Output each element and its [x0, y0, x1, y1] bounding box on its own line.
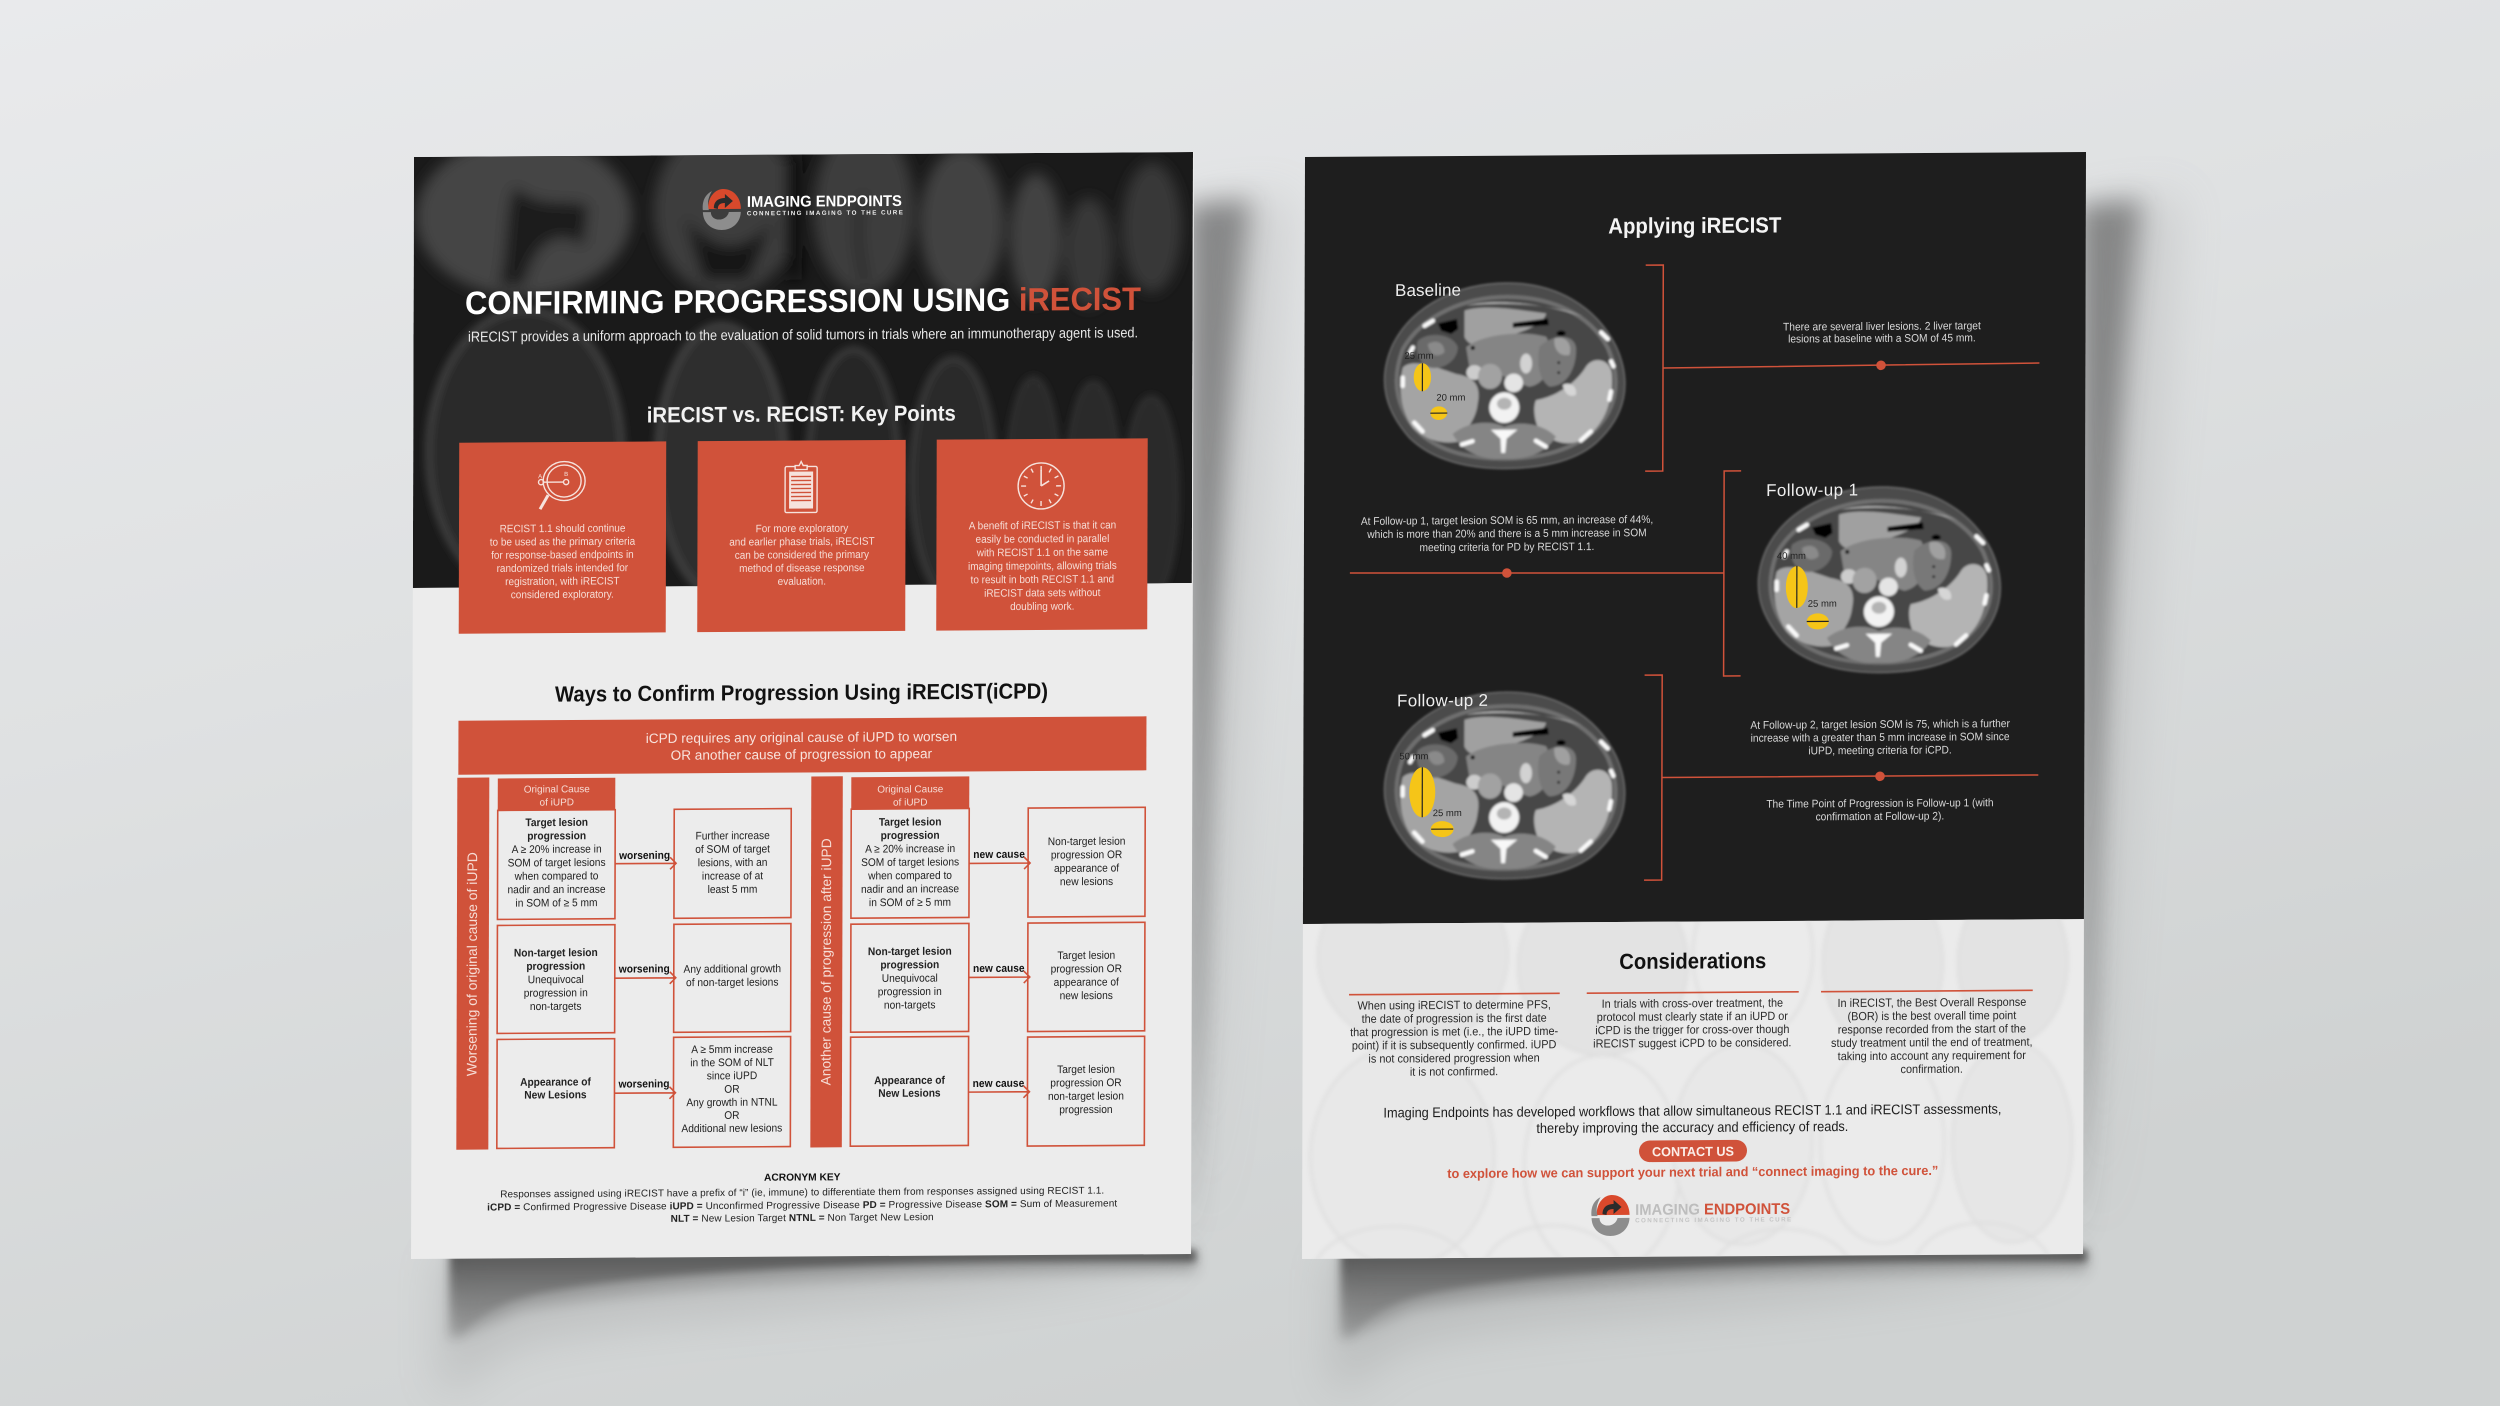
logo: Imaging Endpoints: CONNECTING IMAGING TO THE CURE: [747, 209, 903, 217]
column: PFS consideration: that progression is met (i.e., the iUPD time-: [1350, 1026, 1558, 1039]
text: key point 1: registration, with iRECIST: [505, 576, 620, 588]
side bar: worsening of original cause: Worsening of original cause of iUPD: [464, 852, 480, 1076]
cell: target lesion progression: Target lesion: [525, 816, 588, 829]
CT scan: follow-up 2: [1384, 690, 1625, 880]
cell: appearance of new lesions: [850, 1036, 969, 1146]
cell: non-target lesion progression: non-targets: [884, 999, 936, 1012]
cell: target lesion progression: nadir and an increase: [507, 883, 606, 896]
text: key point 3: easily be conducted in parallel: [976, 534, 1109, 546]
cell: target lesion progression: Target lesion: [879, 816, 942, 829]
cell: non-target lesion progression: non-targets: [530, 1000, 582, 1013]
lesion: 40 mm: [1777, 551, 1808, 608]
lesion: 25 mm: 25 mm: [1433, 808, 1462, 819]
icon: clipboard: [785, 461, 817, 513]
text: key point 3: doubling work.: [1010, 601, 1074, 613]
acronym key: [487, 1170, 1117, 1226]
text: follow-up 1: [1361, 514, 1653, 555]
cell: target lesion progression: [851, 808, 969, 918]
cell: target or non-target progression: progression OR: [1050, 1077, 1122, 1090]
text: baseline: lesions at baseline with a SOM of 45 mm.: [1788, 332, 1976, 346]
icon: magnifier measuring A to B: B: [564, 472, 568, 478]
text: key point 1: for response-based endpoints in: [491, 550, 634, 562]
text: follow-up 1: meeting criteria for PD by RECIST 1.1.: [1419, 541, 1594, 554]
cell: non-target lesion progression: progression in: [878, 986, 942, 998]
header band with brain scans: [413, 122, 1193, 602]
button: contact us: CONTACT US: [1652, 1144, 1734, 1159]
arrow: worsening 1: worsening: [618, 849, 670, 862]
cell: target or new lesions: appearance of: [1054, 976, 1119, 989]
lesion: 25 mm: 25 mm: [1404, 351, 1434, 362]
panel: key point 2: [697, 440, 906, 632]
cell: non-target lesion progression: Non-target lesion: [868, 945, 952, 958]
acronym key: iCPD = Confirmed Progressive Disease iUPD = Unconfirmed Progressive Disease PD = Progressive Disease SOM = Sum of Measurement: [487, 1198, 1117, 1214]
text: key point 1: randomized trials intended for: [497, 563, 629, 575]
arrow: worsening 1: [615, 849, 676, 870]
button: contact us: [1639, 1140, 1747, 1162]
text: key point 2: can be considered the primary: [735, 550, 870, 562]
brain watermark: [1318, 919, 2068, 1259]
table: another cause of progression: [850, 775, 1145, 1147]
cell: non-target lesion progression: progression: [880, 959, 939, 972]
banner: iCPD requirement: iCPD requires any original cause of iUPD to worsen: [646, 729, 957, 746]
header: original cause: [498, 778, 615, 810]
cell: further increase: lesions, with an: [698, 856, 768, 869]
subtitle: iRECIST provides a uniform approach to the evaluation of solid tumors in trials where an immunotherapy agent is used.: [468, 325, 1138, 346]
cell: target lesion progression: when compared to: [867, 870, 952, 883]
cell: further increase: Further increase: [696, 830, 770, 843]
text: key point 1: considered exploratory.: [511, 589, 614, 601]
cell: target lesion progression: in SOM of ≥ 5 mm: [869, 896, 951, 909]
bracket: baseline: [1645, 263, 2040, 471]
call to action: to explore how we can support your next trial and “connect imaging to the cure.”: [1447, 1163, 1938, 1181]
cell: non-target or new lesions: appearance of: [1054, 862, 1119, 875]
banner: iCPD requirement: OR another cause of progression to appear: [671, 746, 933, 763]
cell: target or non-target progression: [1027, 1036, 1145, 1146]
cell: target lesion progression: A ≥ 20% increase in: [865, 843, 955, 856]
column: PFS consideration: When using iRECIST to determine PFS,: [1357, 999, 1551, 1013]
shadow: right page: [1331, 195, 2181, 1395]
text: key point 1: to be used as the primary criteria: [490, 536, 635, 549]
banner: iCPD requirement: [458, 716, 1146, 775]
cell: further increase: [674, 809, 791, 918]
text: follow-up 2: increase with a greater than 5 mm increase in SOM since: [1751, 731, 2010, 745]
cell: non-target lesion progression: Unequivocal: [882, 972, 938, 985]
cell: further increase: least 5 mm: [708, 883, 758, 896]
cell: NLT growth: OR: [724, 1109, 740, 1122]
logo: Imaging Endpoints: IMAGING ENDPOINTS: [1635, 1201, 1790, 1219]
text: baseline: There are several liver lesions. 2 liver target: [1783, 320, 1981, 334]
header: original cause: [851, 776, 969, 809]
arrow: worsening 2: worsening: [618, 963, 670, 976]
text: key point 2: [729, 523, 875, 588]
arrow: new cause 1: [969, 848, 1030, 869]
cell: target lesion progression: [497, 810, 615, 919]
column: BOR consideration: study treatment until the end of treatment,: [1831, 1036, 2033, 1050]
cell: NLT growth: A ≥ 5mm increase: [691, 1043, 773, 1056]
arrow: worsening 3: [614, 1078, 676, 1099]
title: CONFIRMING PROGRESSION USING iRECIST: [465, 281, 1141, 321]
cell: additional growth: [674, 924, 791, 1032]
logo: Imaging Endpoints: [703, 188, 903, 230]
column: cross-over consideration: In trials with cross-over treatment, the: [1602, 997, 1783, 1011]
panel: key point 1: [459, 441, 666, 634]
heading: applying iRECIST: Applying iRECIST: [1608, 212, 1782, 239]
column: BOR consideration: [1821, 990, 2033, 1077]
column: cross-over consideration: iCPD is the trigger for cross-over though: [1595, 1024, 1789, 1037]
side bar: another cause of progression: Another cause of progression after iUPD: [818, 838, 834, 1085]
cell: target lesion progression: A ≥ 20% increase in: [512, 843, 602, 856]
column: cross-over consideration: iRECIST suggest iCPD to be considered.: [1593, 1037, 1791, 1051]
lesion: 20 mm: 20 mm: [1436, 392, 1465, 404]
column: PFS consideration: is not considered progression when: [1368, 1052, 1540, 1066]
cell: appearance of new lesions: Appearance of: [520, 1076, 591, 1089]
heading: key points: iRECIST vs. RECIST: Key Points: [647, 401, 956, 428]
cell: non-target lesion progression: [851, 923, 969, 1032]
cell: target lesion progression: in SOM of ≥ 5 mm: [515, 897, 598, 910]
lesion: 50 mm: [1399, 751, 1435, 817]
bracket: follow-up 2: [1644, 673, 2039, 880]
bracket: follow-up 1: [1350, 471, 1741, 678]
text: key point 2: For more exploratory: [756, 523, 849, 535]
cell: non-target or new lesions: progression OR: [1051, 849, 1123, 862]
text: follow-up 1: At Follow-up 1, target lesion SOM is 65 mm, an increase of 44%,: [1361, 514, 1653, 528]
header: original cause: Original Cause: [877, 784, 944, 796]
acronym key: ACRONYM KEY: [764, 1172, 841, 1184]
text: follow-up 1: which is more than 20% and there is a 5 mm increase in SOM: [1366, 527, 1647, 541]
header: original cause: of iUPD: [540, 797, 574, 809]
header: original cause: Original Cause: [524, 784, 590, 796]
cell: NLT growth: OR: [724, 1083, 740, 1096]
text: key point 1: RECIST 1.1 should continue: [500, 523, 626, 535]
paragraph: workflows: thereby improving the accuracy and efficiency of reads.: [1536, 1118, 1848, 1136]
column: BOR consideration: response recorded from the start of the: [1838, 1023, 2026, 1037]
paragraph: workflows: Imaging Endpoints has developed workflows that allow simultaneous RECIST 1.1 and iRECIST assessments,: [1383, 1101, 2001, 1120]
lesion: 25 mm: [1807, 599, 1837, 629]
arrow: new cause 3: new cause: [973, 1077, 1024, 1090]
arrow: worsening 3: worsening: [618, 1078, 670, 1091]
lesion: 50 mm: 50 mm: [1399, 751, 1429, 762]
text: key point 3: A benefit of iRECIST is that it can: [969, 520, 1116, 532]
arrow: worsening 2: [615, 963, 676, 984]
CT scan: follow-up 2: Follow-up 2: [1397, 691, 1488, 710]
column: BOR consideration: confirmation.: [1901, 1063, 1963, 1076]
cell: additional growth: of non-target lesions: [686, 976, 778, 989]
cell: NLT growth: Any growth in NTNL: [686, 1096, 778, 1109]
cell: target lesion progression: progression: [527, 830, 586, 843]
column: PFS consideration: point) if it is subsequently confirmed. iUPD: [1352, 1039, 1556, 1053]
text: follow-up 2: iUPD, meeting criteria for iCPD.: [1808, 744, 1952, 757]
text: follow-up 2: At Follow-up 2, target lesion SOM is 75, which is a further: [1750, 718, 2010, 732]
cell: non-target lesion progression: progression: [526, 960, 585, 973]
acronym key: NLT = New Lesion Target NTNL = Non Target New Lesion: [671, 1212, 934, 1225]
cell: target or new lesions: new lesions: [1060, 990, 1113, 1002]
text: key point 3: [968, 520, 1117, 613]
cell: target lesion progression: when compared to: [514, 870, 599, 883]
heading: considerations: Considerations: [1619, 948, 1766, 974]
CT scan: follow-up 1: [1758, 480, 2001, 673]
icon: magnifier measuring A to B: A: [538, 474, 542, 480]
paper sheet: [411, 152, 1194, 1259]
cell: further increase: of SOM of target: [695, 843, 770, 856]
lesion: 25 mm: [1431, 808, 1462, 837]
cell: target lesion progression: nadir and an increase: [861, 883, 959, 896]
paragraph: workflows: [1383, 1101, 2001, 1137]
paper sheet: [1302, 152, 2086, 1259]
text: key point 3: to result in both RECIST 1.1 and: [971, 574, 1114, 586]
cell: non-target or new lesions: [1028, 807, 1145, 917]
panel: key point 3: [936, 438, 1148, 631]
column: cross-over consideration: [1587, 992, 1799, 1051]
cell: target or non-target progression: Target lesion: [1057, 1063, 1115, 1076]
side bar: worsening of original cause: [456, 778, 489, 1150]
shadow: left page: [440, 195, 1290, 1395]
text: key point 3: imaging timepoints, allowing trials: [968, 561, 1117, 573]
cell: target or non-target progression: progression: [1059, 1104, 1113, 1116]
panel: right page: [1302, 152, 2086, 1327]
column: BOR consideration: In iRECIST, the Best Overall Response: [1838, 996, 2026, 1010]
lesion: 25 mm: [1404, 351, 1434, 391]
column: BOR consideration: (BOR) is the best overall time point: [1847, 1010, 2017, 1023]
text: baseline: [1783, 320, 1981, 346]
arrow: new cause 1: new cause: [973, 848, 1025, 861]
cell: target or non-target progression: non-target lesion: [1048, 1090, 1124, 1103]
cell: further increase: increase of at: [702, 870, 763, 883]
CT scan: baseline: [1384, 280, 1625, 469]
column: PFS consideration: the date of progression is the first date: [1362, 1012, 1547, 1026]
column: PFS consideration: [1349, 993, 1560, 1079]
cell: NLT growth: since iUPD: [707, 1070, 758, 1083]
lesion: 40 mm: 40 mm: [1777, 551, 1806, 562]
text: key point 2: and earlier phase trials, iRECIST: [729, 536, 875, 549]
cell: appearance of new lesions: [497, 1039, 615, 1148]
cell: NLT growth: [673, 1037, 791, 1147]
panel: left page: [411, 122, 1194, 1259]
cell: target or new lesions: [1028, 922, 1145, 1032]
text: key point 3: with RECIST 1.1 on the same: [976, 547, 1108, 559]
cell: target lesion progression: progression: [881, 829, 940, 842]
icon: clock: [1018, 463, 1064, 509]
CT scan: baseline: Baseline: [1395, 281, 1461, 300]
cell: non-target lesion progression: [497, 925, 615, 1033]
cell: additional growth: Any additional growth: [684, 963, 781, 976]
cell: non-target lesion progression: Non-target lesion: [514, 947, 598, 960]
text: follow-up 2: The Time Point of Progression is Follow-up 1 (with: [1766, 797, 1994, 811]
logo: Imaging Endpoints: [1591, 1194, 1791, 1236]
table: worsening of original cause: [497, 777, 791, 1148]
text: follow-up 2: confirmation at Follow-up 2).: [1816, 810, 1944, 823]
cell: NLT growth: in the SOM of NLT: [690, 1056, 774, 1069]
column: PFS consideration: it is not confirmed.: [1410, 1066, 1498, 1079]
text: key point 1: [490, 523, 635, 602]
logo: Imaging Endpoints: CONNECTING IMAGING TO THE CURE: [1635, 1216, 1791, 1224]
text: follow-up 2: [1750, 718, 2010, 824]
cell: target lesion progression: SOM of target lesions: [508, 857, 606, 870]
arrow: new cause 3: [968, 1077, 1030, 1098]
cell: non-target lesion progression: Unequivocal: [528, 974, 584, 986]
cell: appearance of new lesions: Appearance of: [874, 1074, 945, 1087]
cell: non-target lesion progression: progression in: [524, 987, 588, 1000]
lesion: 20 mm: [1430, 392, 1465, 420]
text: key point 2: evaluation.: [778, 576, 826, 588]
cell: target lesion progression: SOM of target lesions: [861, 856, 959, 869]
acronym key: Responses assigned using iRECIST have a prefix of “i” (ie, immune) to differentiate them from responses assigned using RECIST 1.1.: [500, 1186, 1104, 1200]
logo: Imaging Endpoints: IMAGING ENDPOINTS: [747, 193, 902, 211]
cell: non-target or new lesions: Non-target lesion: [1048, 835, 1126, 848]
cell: target or new lesions: progression OR: [1051, 963, 1122, 976]
cell: NLT growth: Additional new lesions: [681, 1122, 782, 1135]
cell: target or new lesions: Target lesion: [1057, 949, 1115, 962]
cell: appearance of new lesions: New Lesions: [524, 1089, 587, 1102]
column: BOR consideration: taking into account any requirement for: [1838, 1050, 2026, 1063]
cell: appearance of new lesions: New Lesions: [878, 1087, 941, 1100]
header: original cause: of iUPD: [893, 797, 927, 809]
lesion: 25 mm: 25 mm: [1808, 599, 1837, 610]
icon: magnifier measuring A to B: [538, 461, 585, 509]
heading: ways to confirm: Ways to Confirm Progression Using iRECIST(iCPD): [555, 678, 1048, 707]
CT scan: follow-up 1: Follow-up 1: [1766, 480, 1858, 500]
cell: non-target or new lesions: new lesions: [1060, 876, 1113, 888]
arrow: new cause 2: [969, 962, 1030, 983]
column: cross-over consideration: protocol must clearly state if an iUPD or: [1597, 1010, 1788, 1024]
side bar: another cause of progression: [810, 776, 843, 1147]
text: key point 3: iRECIST data sets without: [984, 588, 1101, 600]
arrow: new cause 2: new cause: [973, 962, 1025, 975]
text: key point 2: method of disease response: [739, 563, 865, 575]
dark section: [1303, 152, 2086, 924]
